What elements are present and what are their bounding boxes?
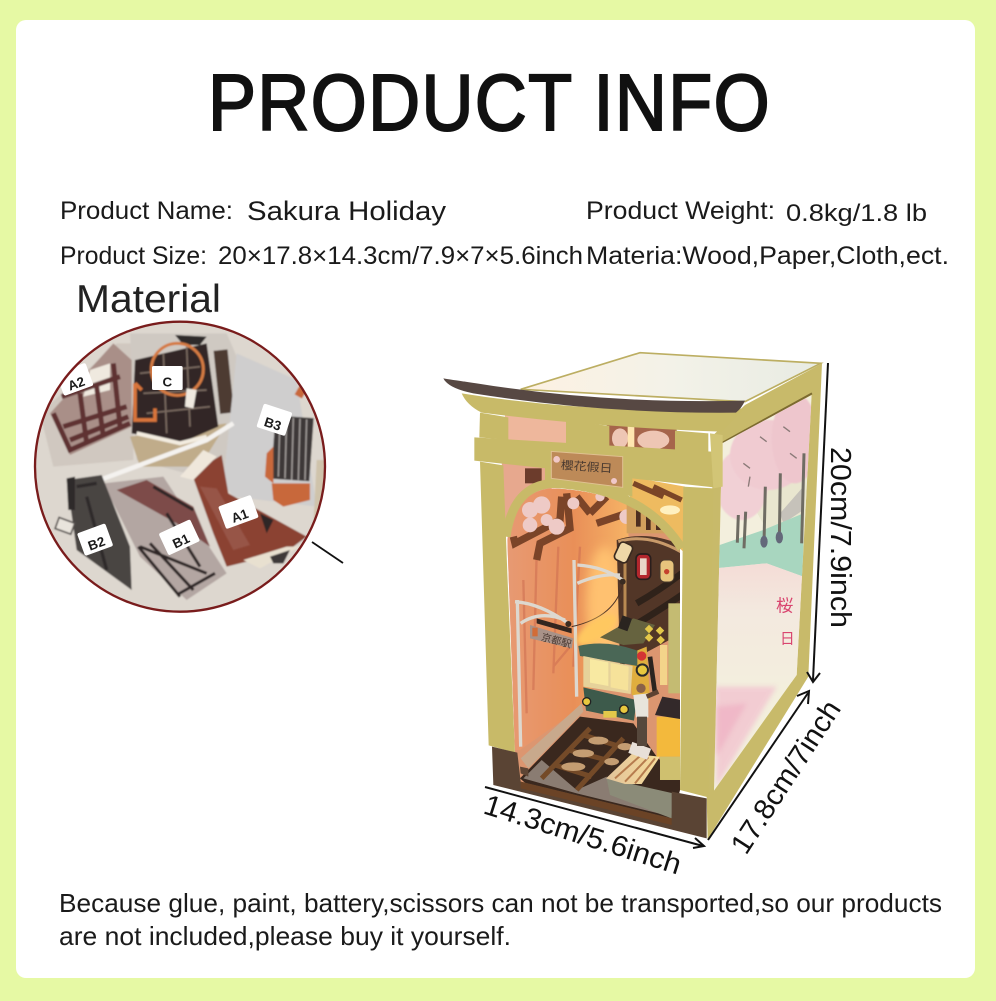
text block: footer note bbox=[59, 888, 942, 951]
part labels: B3 bbox=[262, 414, 283, 434]
front frame bbox=[462, 393, 745, 797]
label: depth: 17.8cm/7inch bbox=[725, 695, 848, 860]
arrow: depth bbox=[708, 691, 809, 840]
name plaque bbox=[551, 451, 623, 487]
text block: footer note: are not included,please buy it yourself. bbox=[59, 921, 511, 951]
part labels: A1 bbox=[229, 506, 251, 526]
title: PRODUCT INFO bbox=[208, 59, 770, 148]
lintel bbox=[462, 393, 745, 432]
text block: product specifications: 0.8kg/1.8 lb bbox=[786, 200, 927, 227]
text block: product specifications: Sakura Holiday bbox=[247, 196, 447, 226]
track bed bbox=[520, 717, 680, 820]
name plaque: 櫻花假日 bbox=[560, 458, 613, 475]
side frame bbox=[707, 363, 822, 839]
text block: product specifications: Product Weight: bbox=[586, 197, 775, 225]
poles and sign: 京都駅 bbox=[540, 631, 573, 651]
label: width: 14.3cm/5.6inch bbox=[480, 789, 685, 881]
roof bbox=[443, 378, 745, 413]
bag B1 bbox=[100, 423, 233, 600]
heading: Material: Material bbox=[76, 278, 221, 321]
part labels: B2 bbox=[86, 534, 107, 554]
arch band bbox=[506, 483, 682, 548]
shelter bbox=[657, 717, 681, 757]
text block: product specifications: Materia:Wood,Paper,Cloth,ect. bbox=[586, 242, 949, 270]
spandrel bbox=[545, 467, 632, 497]
windows behind beams bbox=[502, 415, 685, 553]
figure bbox=[633, 684, 658, 746]
lanterns bbox=[613, 541, 674, 582]
part labels bbox=[56, 363, 292, 556]
blossom branches bbox=[513, 493, 637, 560]
lower beam bbox=[474, 437, 714, 487]
side art panel bbox=[714, 395, 812, 790]
right gable and tunnel bbox=[626, 505, 664, 534]
side art panel: 桜 bbox=[776, 596, 793, 616]
bag B3 bbox=[224, 354, 324, 520]
text block: product specifications: Product Name: bbox=[60, 197, 233, 225]
text block: product specifications bbox=[60, 196, 949, 270]
right wall bbox=[668, 603, 680, 694]
crossing signal bbox=[637, 625, 667, 693]
side art panel: 日 bbox=[780, 631, 795, 647]
arrow: small pointer bbox=[312, 542, 343, 563]
arrow: height bbox=[807, 363, 828, 682]
lower scene bbox=[515, 560, 682, 820]
upper posts bbox=[479, 413, 508, 440]
text block: product specifications: 20×17.8×14.3cm/7.9×7×5.6inch bbox=[218, 242, 583, 270]
product illustration: book nook model bbox=[443, 353, 822, 839]
left pillar bbox=[480, 462, 515, 753]
poles and sign bbox=[515, 560, 626, 747]
arrow: width bbox=[485, 787, 704, 848]
train bbox=[578, 615, 655, 721]
panel: material parts circle photo bbox=[30, 317, 330, 617]
text block: footer note: Because glue, paint, battery,scissors can not be transported,so our products bbox=[59, 888, 942, 918]
glow bbox=[574, 611, 620, 646]
scene interior bbox=[505, 483, 683, 823]
bag C bbox=[132, 335, 234, 443]
bag B2 bbox=[55, 475, 132, 590]
top panel bbox=[521, 353, 821, 402]
part labels: B1 bbox=[170, 530, 193, 552]
label: height: 20cm/7.9inch bbox=[824, 447, 856, 628]
part labels: C bbox=[163, 375, 173, 390]
right pillar bbox=[680, 487, 713, 797]
bag A1 bbox=[180, 450, 307, 568]
back wall bbox=[505, 483, 630, 750]
base bbox=[492, 747, 707, 838]
rails and ballast bbox=[542, 728, 623, 790]
part labels: A2 bbox=[66, 374, 87, 394]
ledge bbox=[521, 703, 583, 768]
platform bbox=[607, 778, 673, 818]
bag A2 bbox=[50, 343, 132, 455]
text block: product specifications: Product Size: bbox=[60, 242, 207, 270]
